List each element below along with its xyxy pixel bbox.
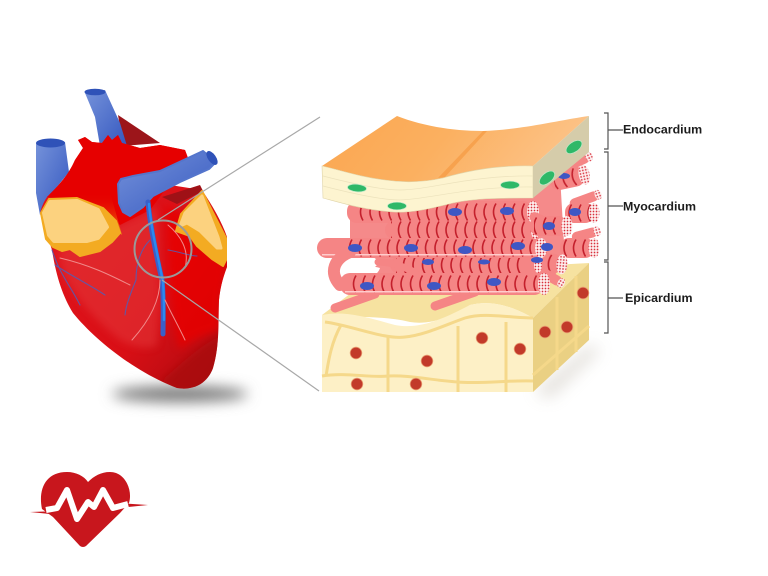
dark band behind vessel [162, 185, 203, 204]
epicardium layer [322, 263, 589, 392]
logo: heart with pulse [30, 472, 148, 547]
hidden second fibre row [385, 221, 539, 239]
right fat pad [176, 191, 226, 266]
endocardium top face [322, 116, 589, 182]
epicardium front face [322, 303, 533, 392]
zoom circle [134, 220, 192, 278]
myocardium fibres [317, 150, 603, 308]
fat cell borders [322, 276, 589, 392]
endocardium front face [322, 166, 533, 212]
vessel opening [204, 149, 220, 167]
logo heart [41, 472, 130, 547]
aorta left branch [36, 138, 69, 215]
bottom tail fibres [335, 292, 475, 308]
left fat pad [41, 198, 120, 256]
back right fibres [548, 150, 603, 258]
middle fibre row [390, 257, 542, 273]
adipocyte nuclei [350, 287, 589, 390]
left ventricle bright area [165, 205, 230, 350]
pink backing between fibres [350, 175, 565, 292]
crossing fibres right [528, 210, 572, 289]
fibre nuclei [348, 173, 581, 290]
great vessel crossing heart [118, 151, 216, 216]
coronary vessels [52, 202, 197, 340]
branching fibres [334, 252, 415, 285]
endocardium label: Endocardium [623, 122, 702, 136]
endocardium bracket [604, 113, 623, 149]
first fibre row [347, 201, 539, 223]
hole in fibres, white [346, 266, 380, 279]
heart illustration [36, 89, 248, 402]
epicardium label: Epicardium [625, 291, 692, 305]
heart ground shadow [112, 386, 248, 402]
orange blend above fat [76, 192, 122, 235]
second fibre row [317, 238, 547, 258]
heart silhouette [40, 135, 227, 389]
myocardium bracket [604, 152, 623, 260]
pulmonary artery, back [118, 115, 160, 146]
superior vena cava [84, 89, 127, 146]
third fibre row [340, 273, 550, 295]
epicardium top face [322, 263, 589, 323]
wall cross-section [317, 116, 603, 398]
endocardium striations [323, 176, 533, 200]
logo pulse line [46, 490, 128, 519]
green endothelial nuclei [347, 138, 584, 210]
endocardium side face [533, 116, 589, 198]
zoom guide line, lower [162, 280, 319, 391]
logo pulse tails [30, 503, 148, 515]
lower right shading [160, 338, 218, 389]
epicardium bracket [604, 262, 623, 333]
layer brackets and labels [604, 113, 702, 333]
myocardium label: Myocardium [623, 200, 696, 214]
zoom guide line, upper [158, 117, 320, 220]
fold on top face [438, 131, 487, 178]
upper red atria [47, 135, 188, 225]
right ventricle lighter area [58, 207, 160, 348]
endocardium layer [322, 116, 589, 212]
heart shading clipped to silhouette [58, 205, 230, 393]
epicardium side face [533, 263, 589, 392]
soft block shadow [535, 345, 600, 398]
